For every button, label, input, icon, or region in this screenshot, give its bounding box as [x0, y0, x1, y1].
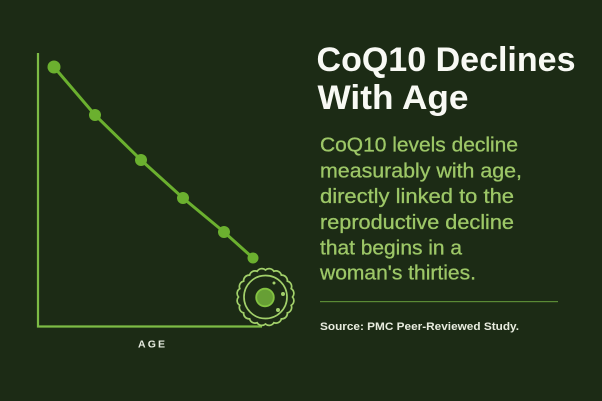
- chart axes: [38, 53, 262, 326]
- line chart: decline with age: [38, 53, 294, 350]
- title: [316, 41, 576, 117]
- body text: that begins in a: [320, 236, 463, 260]
- body text: woman's thirties.: [319, 262, 476, 284]
- declining data line: [48, 60, 258, 264]
- title: With Age: [318, 79, 468, 117]
- source note: Source: PMC Peer-Reviewed Study.: [320, 321, 519, 333]
- body text: [319, 134, 522, 284]
- x axis label: AGE: [138, 338, 165, 350]
- title: CoQ10 Declines: [316, 41, 576, 79]
- body text: CoQ10 levels decline: [320, 134, 518, 156]
- body text: directly linked to the: [320, 185, 514, 208]
- body text: measurably with age,: [320, 160, 522, 182]
- icon: egg cell: [237, 269, 294, 325]
- body text: reproductive decline: [320, 211, 514, 234]
